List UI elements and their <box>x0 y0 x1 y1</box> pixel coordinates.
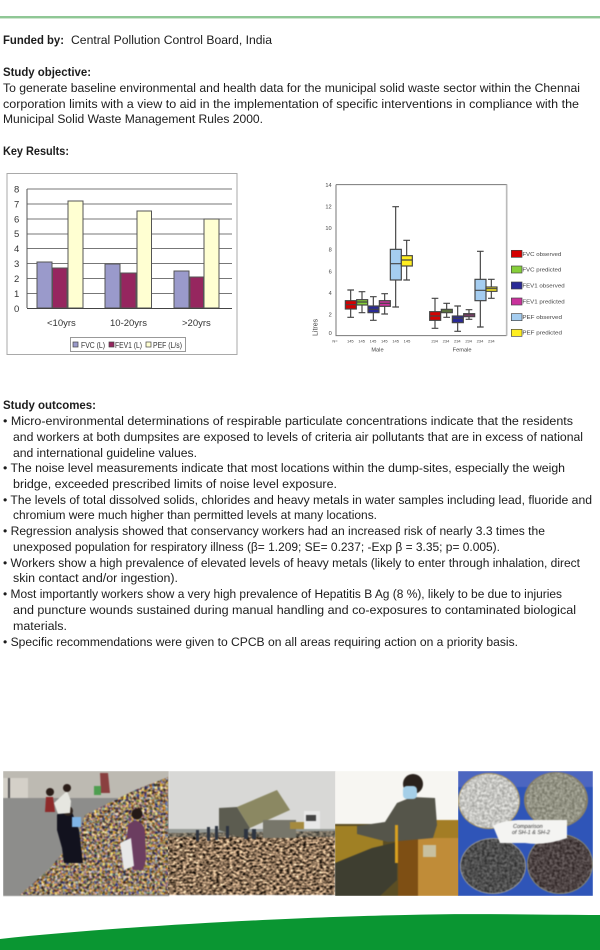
legend: FVC observed <box>522 252 561 258</box>
axis labels: 234 <box>443 339 450 344</box>
funded by line: Funded by: <box>3 33 64 47</box>
bar chart: lung function by years of service: 1 <box>14 289 19 300</box>
study outcomes: • The noise level measurements indicate that most locations within the dump-sites, especially the weigh <box>3 461 565 475</box>
photo: waste pickers on garbage pile <box>3 771 170 897</box>
axis labels: 4 <box>329 291 332 297</box>
bottom green wave <box>0 914 600 950</box>
axis labels: 145 <box>370 339 377 344</box>
study objective: To generate baseline environmental and health data for the municipal solid waste sector within the Chennai <box>3 81 580 95</box>
legend: FEV1 predicted <box>522 299 565 305</box>
bar chart: lung function by years of service: 0 <box>14 304 19 315</box>
axis labels <box>312 183 495 354</box>
axis labels: 10 <box>325 226 332 232</box>
study outcomes: Study outcomes: <box>3 398 96 412</box>
bar chart: lung function by years of service: 4 <box>14 244 19 255</box>
legend: FVC predicted <box>522 268 561 274</box>
study outcomes: • Regression analysis showed that conservancy workers had an increased risk of nearly 3.3 times the <box>3 524 545 538</box>
photo: tipping truck on dump site <box>168 771 336 897</box>
legend: PEF predicted <box>522 331 562 337</box>
study outcomes: • Micro-environmental determinations of respirable particulate concentrations indicate that the residents <box>3 414 573 428</box>
study outcomes: skin contact and/or ingestion). <box>13 571 178 585</box>
study outcomes: and puncture wounds sustained during manual handling and co-exposures to contaminated biological <box>13 603 576 617</box>
bar chart: lung function by years of service: 5 <box>14 229 19 240</box>
axis labels: 0 <box>329 331 332 337</box>
study outcomes: • Workers show a high prevalence of elevated levels of heavy metals (likely to enter through inhalation, direct <box>3 556 581 570</box>
axis labels: 234 <box>431 339 439 344</box>
funded by line: Central Pollution Control Board, India <box>71 33 272 47</box>
study objective <box>3 65 580 126</box>
axis labels: 234 <box>488 339 495 344</box>
study outcomes: bridge, exceeded prescribed limits of noise level exposure. <box>13 477 337 491</box>
study outcomes: and international guideline values. <box>13 446 197 460</box>
study outcomes: and workers at both dumpsites are exposed to levels of criteria air pollutants that are in excess of national <box>13 430 583 444</box>
study outcomes <box>3 398 592 649</box>
study outcomes: • Most importantly workers show a very high prevalence of Hepatitis B Ag (8 %), likely to be due to injuries <box>3 587 562 601</box>
axis labels: 145 <box>358 339 366 344</box>
top green rule <box>0 16 600 19</box>
study outcomes: unexposed population for respiratory illness (β= 1.209; SE= 0.237; -Exp β = 3.35; p= 0.005). <box>13 540 500 554</box>
axis labels: Male <box>371 348 384 354</box>
axis labels: 145 <box>347 339 354 344</box>
axis labels: 234 <box>454 339 461 344</box>
legend: PEF observed <box>522 315 562 321</box>
bar chart: lung function by years of service: 8 <box>14 184 19 196</box>
study outcomes: • The levels of total dissolved solids, chlorides and heavy metals in water samples including lead, fluoride and <box>3 493 592 507</box>
study outcomes: • Specific recommendations were given to CPCB on all areas requiring action on a priority basis. <box>3 635 518 649</box>
legend: FEV1 observed <box>522 284 565 290</box>
photo: conservancy worker with mask on machine <box>335 771 459 896</box>
study objective: corporation limits with a view to aid in the implementation of specific interventions in compliance with the <box>3 97 579 111</box>
bar chart: lung function by years of service: 10-20yrs <box>110 318 147 329</box>
axis labels: Female <box>453 348 472 354</box>
axis labels: 6 <box>329 269 332 275</box>
bar chart: lung function by years of service: PEF (L/s) <box>153 341 182 350</box>
bar chart: lung function by years of service: <10yrs <box>47 318 76 329</box>
bar chart: lung function by years of service: 7 <box>14 200 19 210</box>
axis labels: 2 <box>329 313 332 319</box>
axis labels: 234 <box>477 339 484 344</box>
study objective: Study objective: <box>3 65 91 79</box>
axis labels: 14 <box>325 183 332 189</box>
axis labels: 145 <box>381 339 388 344</box>
figures <box>45 773 146 870</box>
dish label: of SH-1 & SH-2 <box>512 830 550 836</box>
axis labels: 145 <box>404 339 411 344</box>
dish label <box>493 820 567 844</box>
whiskers and boxes <box>345 207 497 331</box>
bar chart: lung function by years of service: >20yrs <box>182 318 211 329</box>
bar chart: lung function by years of service: 6 <box>14 214 19 226</box>
key results heading: Key Results: <box>3 144 69 158</box>
study objective: Municipal Solid Waste Management Rules 2000. <box>3 112 263 126</box>
axis labels: Litres <box>312 318 319 336</box>
axis labels: 12 <box>325 204 332 210</box>
bar chart: lung function by years of service: 2 <box>14 274 19 285</box>
bar chart: lung function by years of service: FEV1 (L) <box>115 341 142 350</box>
axis labels: 234 <box>465 339 473 344</box>
axis labels: N= <box>332 339 338 344</box>
study outcomes: chromium were much higher than permitted levels at many locations. <box>13 508 377 522</box>
box plot: observed and predicted lung function by sex <box>312 183 565 354</box>
bar chart: lung function by years of service: 3 <box>14 259 19 270</box>
dish label: Comparison <box>513 824 543 830</box>
legend <box>511 250 565 337</box>
study outcomes: materials. <box>13 619 67 633</box>
bar chart: lung function by years of service: FVC (L) <box>81 341 105 350</box>
axis labels: 8 <box>329 248 332 254</box>
bar chart: lung function by years of service <box>7 174 237 354</box>
photo: four petri dishes on blue tray <box>458 771 593 896</box>
axis labels: 145 <box>392 339 400 344</box>
